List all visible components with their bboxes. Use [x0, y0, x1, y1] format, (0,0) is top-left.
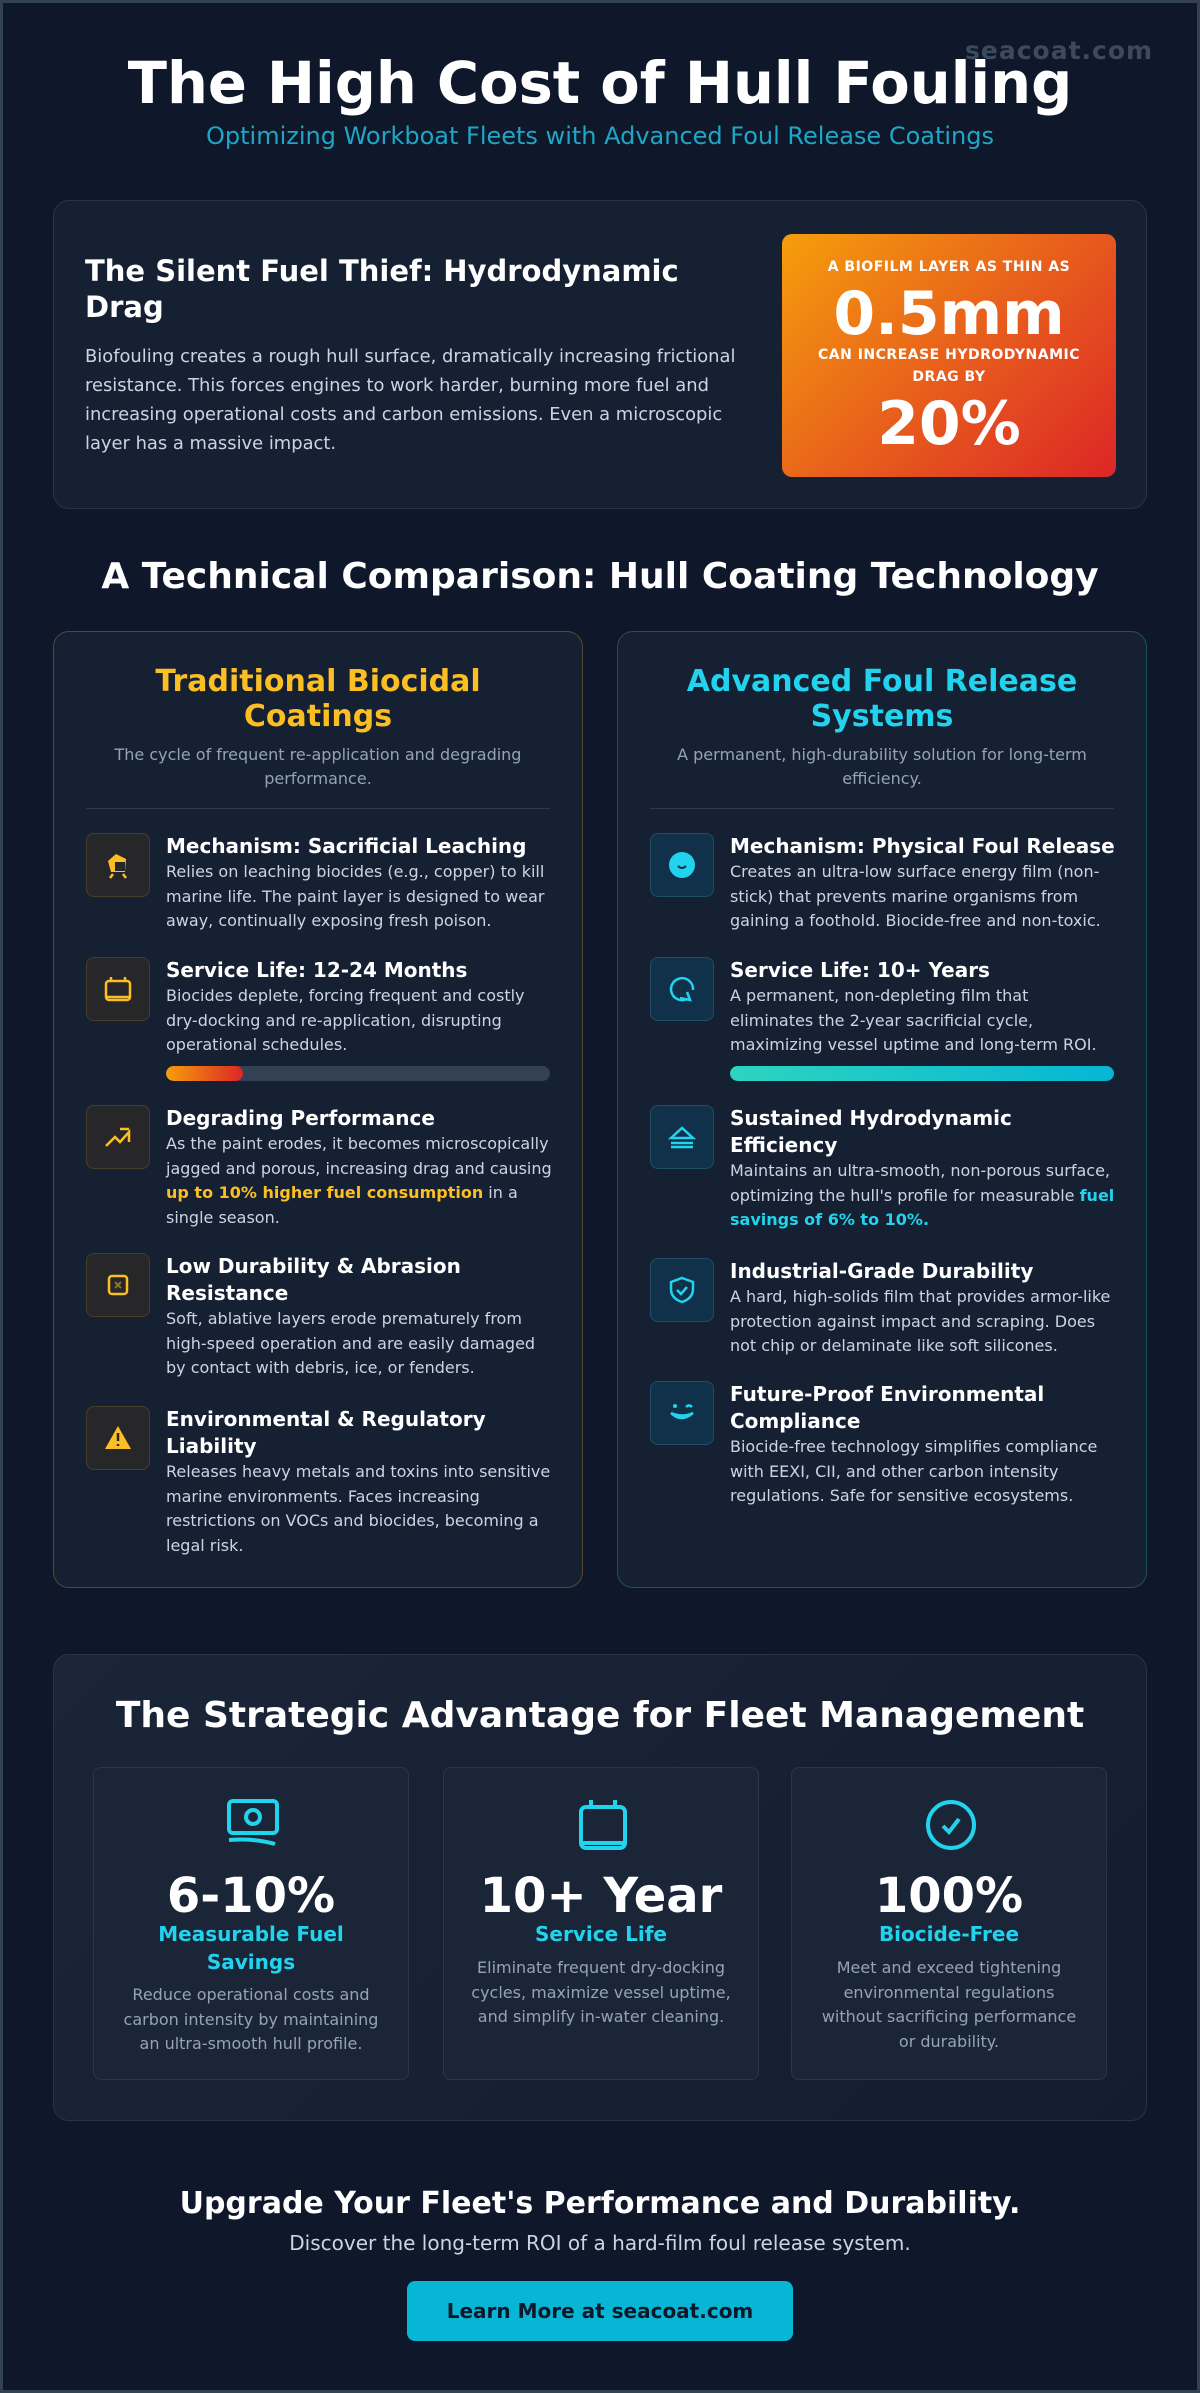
item: physical foul release	[650, 833, 1115, 930]
CTA subtext: Discover the long-term ROI of a hard-film foul release system.	[289, 2231, 911, 2255]
stat card: service life: Eliminate frequent dry-docking cycles, maximize vessel uptime, and simplify in-water cleaning.	[471, 1958, 731, 2026]
title: The High Cost of Hull Fouling	[128, 50, 1072, 117]
item: service life 10+ years	[650, 957, 1114, 1081]
icon: fish	[650, 1381, 714, 1445]
icon: chip	[86, 1253, 150, 1317]
item: low durability: Low Durability & Abrasion Resistance	[166, 1254, 461, 1305]
heading: Advanced Foul Release	[687, 664, 1077, 699]
icon: warning	[86, 1406, 150, 1470]
item: low durability: Soft, ablative layers erode prematurely from high-speed operation and are easily damaged by contact with debris, ice, or fenders.	[166, 1309, 535, 1377]
stat card: service life: Service Life	[535, 1922, 667, 1946]
icon: calendar	[579, 1800, 627, 1850]
icon: skull crossbones	[86, 833, 150, 897]
heading: Coatings	[244, 699, 392, 734]
icon: smooth drop	[650, 833, 714, 897]
item: environmental liability: Releases heavy metals and toxins into sensitive marine environments. Faces increasing restrictions on VOCs and biocides, becoming a legal risk.	[166, 1462, 550, 1554]
icon: chart line	[86, 1105, 150, 1169]
item: service life 10+ years: A permanent, non-depleting film that eliminates the 2-year sacrificial cycle, maximizing vessel uptime and long-term ROI.	[730, 986, 1097, 1054]
item: service life 12-24 months: Service Life: 12-24 Months	[166, 958, 467, 982]
callout: stat box: 0.5mm	[833, 279, 1065, 349]
item: physical foul release: Creates an ultra-low surface energy film (non-stick) that prevents marine organisms from gaining a foothold. Biocide-free and non-toxic.	[730, 862, 1101, 930]
icon: calendar	[86, 957, 150, 1021]
CTA heading: Upgrade Your Fleet's Performance and Durability.	[180, 2186, 1020, 2221]
panel: silent fuel thief	[53, 200, 1147, 509]
progress bar: 100%	[730, 1066, 1114, 1080]
item: low durability	[86, 1253, 535, 1377]
item: degrading performance	[86, 1105, 552, 1226]
item: hydrodynamic efficiency: Sustained Hydrodynamic Efficiency	[730, 1106, 1012, 1157]
stat card: biocide-free: 100%	[875, 1868, 1023, 1924]
heading: hydrodynamic drag: The Silent Fuel Thief: Hydrodynamic Drag	[85, 254, 679, 324]
section heading: comparison: A Technical Comparison: Hull Coating Technology	[101, 556, 1099, 597]
stat card: service life: 10+ Year	[480, 1868, 722, 1924]
button: Learn More at seacoat.com	[447, 2299, 753, 2323]
icon: money	[227, 1799, 279, 1846]
stat card: fuel savings: Reduce operational costs and carbon intensity by maintaining an ultra-smooth hull profile.	[124, 1985, 378, 2053]
icon: eject/hull	[650, 1105, 714, 1169]
item: environmental liability	[86, 1406, 550, 1554]
stat card: biocide-free: Meet and exceed tightening environmental regulations without sacrificing performance or durability.	[822, 1958, 1076, 2050]
item: service life 10+ years: Service Life: 10+ Years	[730, 958, 990, 982]
item: physical foul release: Mechanism: Physical Foul Release	[730, 834, 1115, 858]
stat card: fuel savings: 6-10%	[167, 1868, 335, 1924]
item: industrial durability: A hard, high-solids film that provides armor-like protection against impact and scraping. Does not chip or delaminate like soft silicones.	[730, 1287, 1110, 1355]
item: environmental compliance	[650, 1381, 1097, 1505]
watermark: seacoat.com	[965, 36, 1153, 65]
item: degrading performance: Degrading Performance	[166, 1106, 435, 1130]
callout: stat box	[782, 234, 1116, 477]
item: environmental compliance: Biocide-free technology simplifies compliance with EEXI, CII, and other carbon intensity regulations. Safe for sensitive ecosystems.	[730, 1437, 1097, 1505]
subheading: A permanent, high-durability solution for long-term efficiency.	[677, 745, 1087, 788]
panel: strategic advantage	[53, 1654, 1147, 2121]
item: service life 12-24 months	[86, 957, 550, 1081]
button	[407, 2281, 793, 2341]
heading: Systems	[811, 699, 953, 734]
item: degrading performance: As the paint erodes, it becomes microscopically jagged and porous, increasing drag and causing up to 10% higher fuel consumption in a single season.	[166, 1134, 552, 1226]
subtitle: Optimizing Workboat Fleets with Advanced Foul Release Coatings	[206, 122, 994, 150]
heading: The Strategic Advantage for Fleet Management	[116, 1695, 1084, 1736]
panel: traditional biocidal coatings	[53, 631, 583, 1588]
heading	[155, 664, 481, 734]
progress bar: 20%	[166, 1066, 550, 1080]
stat card: biocide-free	[791, 1767, 1107, 2080]
subheading: The cycle of frequent re-application and degrading performance.	[115, 745, 521, 788]
item: hydrodynamic efficiency: Maintains an ultra-smooth, non-porous surface, optimizing the hull's profile for measurable fuel savings of 6% to 10%.	[730, 1161, 1114, 1229]
stat card: fuel savings	[93, 1767, 409, 2080]
item: sacrificial leaching: Mechanism: Sacrificial Leaching	[166, 834, 526, 858]
heading	[686, 664, 1077, 734]
heading: Traditional Biocidal	[155, 664, 481, 699]
stat card: fuel savings: Measurable Fuel Savings	[158, 1922, 344, 1974]
callout: stat box: CAN INCREASE HYDRODYNAMIC DRAG BY	[818, 347, 1080, 385]
icon: cycle	[650, 957, 714, 1021]
callout: stat box: A BIOFILM LAYER AS THIN AS	[828, 259, 1070, 275]
item: environmental liability: Environmental & Regulatory Liability	[166, 1407, 486, 1458]
item: service life 12-24 months: Biocides deplete, forcing frequent and costly dry-docking and re-application, disrupting operational schedules.	[166, 986, 525, 1054]
icon: check circle	[926, 1800, 976, 1850]
item: sacrificial leaching	[86, 833, 544, 930]
item: industrial durability	[650, 1258, 1110, 1355]
text: biofouling description: Biofouling creates a rough hull surface, dramatically increasing frictional resistance. This forces engines to work harder, burning more fuel and increasing operational costs and carbon emissions. Even a microscopic layer has a massive impact.	[85, 346, 735, 454]
stat card: service life	[443, 1767, 759, 2080]
item: environmental compliance: Future-Proof Environmental Compliance	[730, 1382, 1044, 1433]
item: industrial durability: Industrial-Grade Durability	[730, 1259, 1033, 1283]
stat card: biocide-free: Biocide-Free	[879, 1922, 1019, 1946]
item: hydrodynamic efficiency	[650, 1105, 1114, 1229]
icon: shield check	[650, 1258, 714, 1322]
panel: advanced foul release systems	[617, 631, 1147, 1588]
callout: stat box: 20%	[877, 389, 1021, 459]
item: sacrificial leaching: Relies on leaching biocides (e.g., copper) to kill marine life. The paint layer is designed to wear away, continually exposing fresh poison.	[166, 862, 544, 930]
